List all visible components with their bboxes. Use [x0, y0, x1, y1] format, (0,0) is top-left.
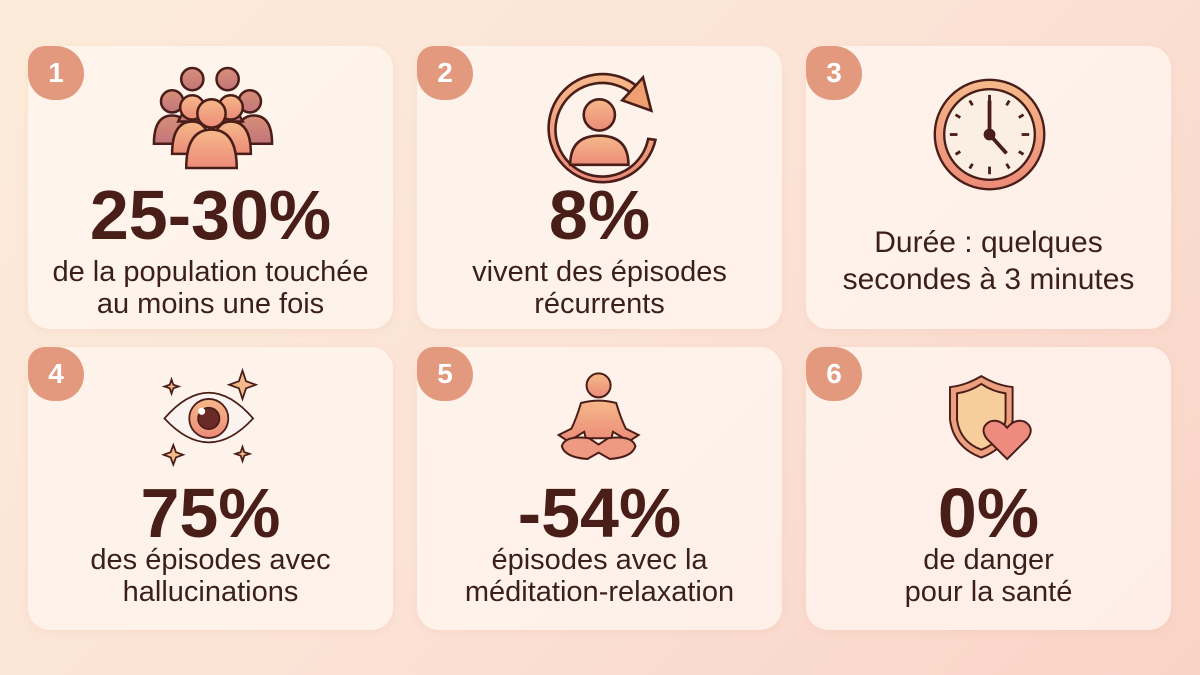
stat: 75%	[140, 474, 281, 552]
badge 6	[806, 347, 862, 401]
description: récurrents	[534, 288, 665, 320]
panel: card 1 population	[28, 46, 393, 329]
description: hallucinations	[123, 576, 298, 608]
stat: -54%	[518, 474, 681, 552]
icon: group of people	[152, 66, 274, 170]
description: de la population touchée	[52, 256, 369, 288]
icon: clock	[934, 78, 1046, 190]
description: au moins une fois	[97, 288, 324, 320]
stat: 8%	[549, 176, 650, 254]
badge 1: 1	[48, 57, 64, 88]
description: épisodes avec la	[491, 544, 708, 576]
icon: shield with heart	[949, 375, 1032, 460]
icon: recurring person	[547, 72, 657, 184]
description: vivent des épisodes	[472, 256, 727, 288]
description	[472, 256, 727, 320]
badge 2: 2	[437, 57, 453, 88]
panel: card 6 no danger	[806, 347, 1171, 630]
badge 5	[417, 347, 473, 401]
panel: card 5 meditation	[417, 347, 782, 630]
badge 4	[28, 347, 84, 401]
description	[465, 544, 734, 608]
icon: meditation person	[556, 372, 640, 460]
description: des épisodes avec	[90, 544, 331, 576]
badge 2	[417, 46, 473, 100]
badge 4: 4	[48, 358, 64, 389]
description	[843, 226, 1134, 296]
panel: card 4 hallucinations	[28, 347, 393, 630]
panel: card 2 recurrence	[417, 46, 782, 329]
badge 5: 5	[437, 358, 453, 389]
description	[905, 544, 1072, 608]
description: Durée : quelques	[874, 226, 1103, 259]
icon: eye with sparkles	[161, 368, 258, 467]
description: pour la santé	[905, 576, 1072, 608]
badge 6: 6	[826, 358, 842, 389]
panel: card 3 duration	[806, 46, 1171, 329]
description	[90, 544, 331, 608]
badge 1	[28, 46, 84, 100]
description	[52, 256, 369, 320]
description: secondes à 3 minutes	[843, 263, 1134, 296]
description: méditation-relaxation	[465, 576, 734, 608]
badge 3	[806, 46, 862, 100]
description: de danger	[923, 544, 1054, 576]
badge 3: 3	[826, 57, 842, 88]
stat: 0%	[938, 474, 1039, 552]
stat: 25-30%	[90, 176, 331, 254]
